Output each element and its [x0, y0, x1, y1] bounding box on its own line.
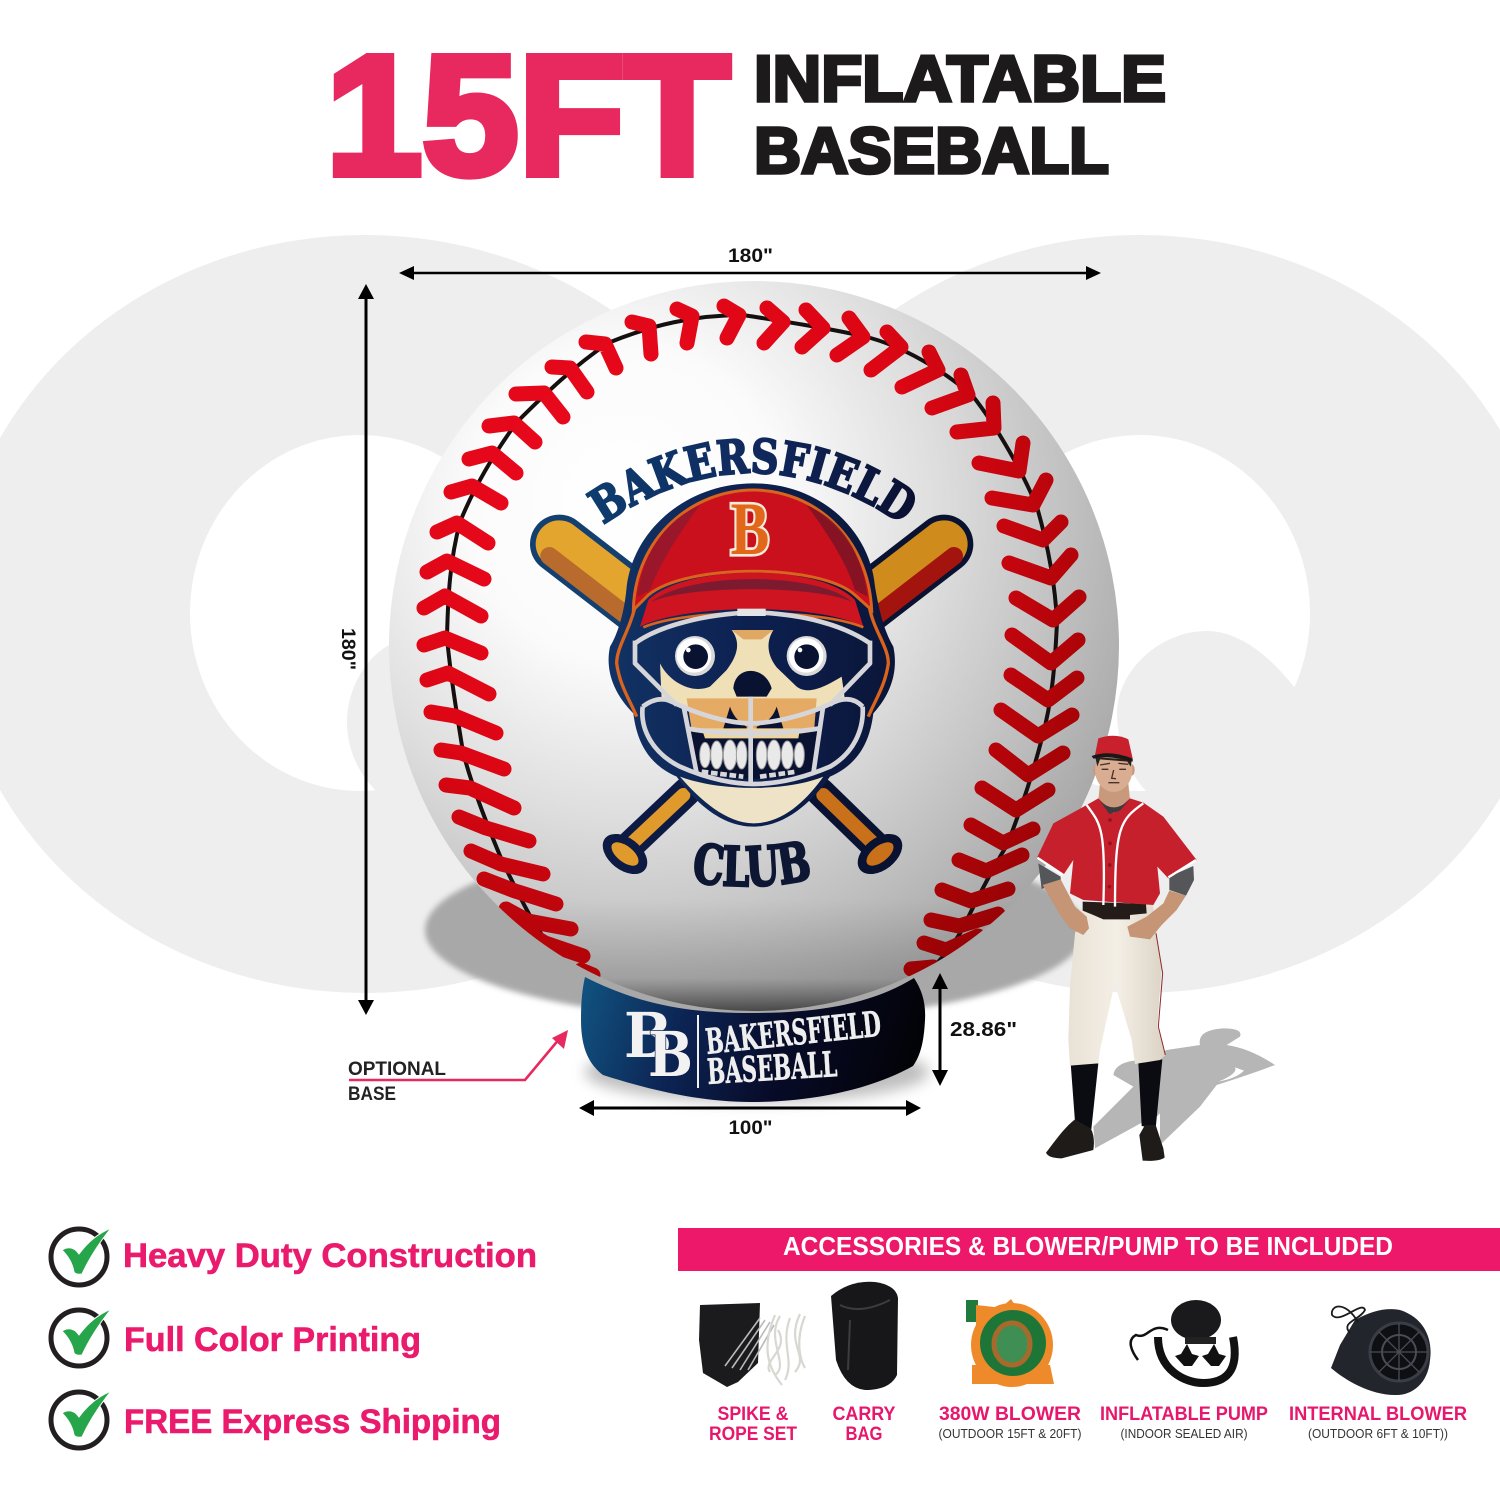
logo text: CLUB: CLUB — [694, 841, 810, 888]
feature: full color printing: Full Color Printing — [124, 1321, 421, 1359]
base text: BAKERSFIELD: BAKERSFIELD — [704, 1004, 883, 1063]
feature: free express shipping: FREE Express Shipping — [124, 1403, 501, 1441]
jersey piping — [1037, 803, 1196, 907]
team logo — [530, 437, 974, 888]
pants — [1068, 903, 1166, 1066]
dimension: base width: 100" — [728, 1118, 772, 1139]
cap — [1095, 736, 1133, 758]
background: interlocked grey rings — [0, 235, 1500, 993]
base monogram: B — [624, 999, 672, 1072]
shoes — [1046, 1119, 1165, 1161]
item: carry bag: CARRY — [832, 1404, 896, 1425]
arms and hands — [1043, 879, 1089, 935]
optional base — [581, 977, 929, 1102]
mouth and teeth — [687, 707, 820, 779]
helmet brim — [640, 572, 863, 627]
dimension: height 180: 180" — [337, 628, 358, 670]
face guard — [635, 609, 870, 784]
socks — [1071, 1059, 1162, 1129]
feature: free express shipping — [51, 1391, 501, 1448]
skull face — [660, 630, 845, 713]
helmet letter B: B — [731, 488, 769, 571]
skull chin — [680, 777, 823, 823]
feature: full color printing — [51, 1309, 421, 1366]
title: INFLATABLE: INFLATABLE — [754, 42, 1166, 115]
title: 15FT: 15FT — [326, 21, 730, 211]
eyes — [675, 636, 715, 676]
dimension: base height: 28.86" — [950, 1019, 1017, 1041]
title — [326, 21, 1166, 211]
player shadow — [1093, 1028, 1275, 1148]
nose — [733, 671, 772, 697]
jersey — [1037, 798, 1197, 905]
callout: optional base — [348, 1030, 568, 1105]
base divider — [697, 1015, 699, 1088]
item: inflatable pump — [1100, 1300, 1268, 1441]
dimension: width 180 — [399, 246, 1101, 280]
neck and head — [1098, 783, 1130, 815]
logo text: BAKERSFIELD: BAKERSFIELD — [585, 437, 916, 525]
callout: optional base: OPTIONAL — [348, 1059, 446, 1080]
belt — [1083, 902, 1147, 919]
feature: heavy duty construction: Heavy Duty Construction — [123, 1237, 537, 1275]
item: inflatable pump: (INDOOR SEALED AIR) — [1120, 1426, 1248, 1441]
orange helmet flaps — [617, 607, 637, 717]
item: internal blower — [1289, 1306, 1467, 1441]
crossed bats — [549, 544, 954, 882]
feature list — [51, 1228, 537, 1448]
item: 380W blower: (OUTDOOR 15FT & 20FT) — [938, 1426, 1082, 1441]
dimension: base height — [932, 973, 1017, 1086]
item: inflatable pump: INFLATABLE PUMP — [1100, 1404, 1268, 1425]
accessories banner: ACCESSORIES & BLOWER/PUMP TO BE INCLUDED — [783, 1231, 1393, 1261]
panel: accessories — [678, 1228, 1500, 1445]
item: 380W blower: 380W BLOWER — [939, 1404, 1081, 1425]
base monogram: B — [648, 1018, 693, 1091]
baseball — [389, 281, 1119, 1011]
feature: heavy duty construction — [51, 1228, 537, 1285]
item: internal blower: INTERNAL BLOWER — [1289, 1404, 1467, 1425]
item: internal blower: (OUTDOOR 6FT & 10FT)) — [1308, 1426, 1448, 1441]
dimension: width 180: 180" — [728, 246, 773, 267]
jersey buttons — [1104, 820, 1116, 887]
player figure — [1037, 736, 1275, 1161]
item: carry bag — [831, 1282, 898, 1445]
helmet dome — [633, 490, 872, 610]
undershirt sleeves — [1038, 863, 1194, 896]
item: spike and rope set — [699, 1303, 805, 1445]
base monogram — [624, 999, 693, 1091]
ground shadow of ball — [425, 840, 1085, 1020]
dimension: height 180 — [337, 284, 374, 1015]
hair — [1095, 757, 1132, 767]
accessories banner — [678, 1228, 1500, 1271]
item: spike and rope set: ROPE SET — [709, 1424, 797, 1445]
face features — [1100, 763, 1128, 783]
callout: optional base: BASE — [348, 1084, 396, 1105]
item: 380W blower — [938, 1299, 1082, 1441]
item: spike and rope set: SPIKE & — [718, 1404, 789, 1425]
item: carry bag: BAG — [846, 1424, 882, 1445]
title: BASEBALL: BASEBALL — [754, 114, 1109, 187]
seam thread — [447, 315, 1057, 975]
base text: BASEBALL: BASEBALL — [706, 1044, 838, 1093]
dimension: base width — [579, 1100, 921, 1139]
skull and helmet silhouette — [609, 483, 895, 827]
red stitches — [424, 306, 1079, 975]
